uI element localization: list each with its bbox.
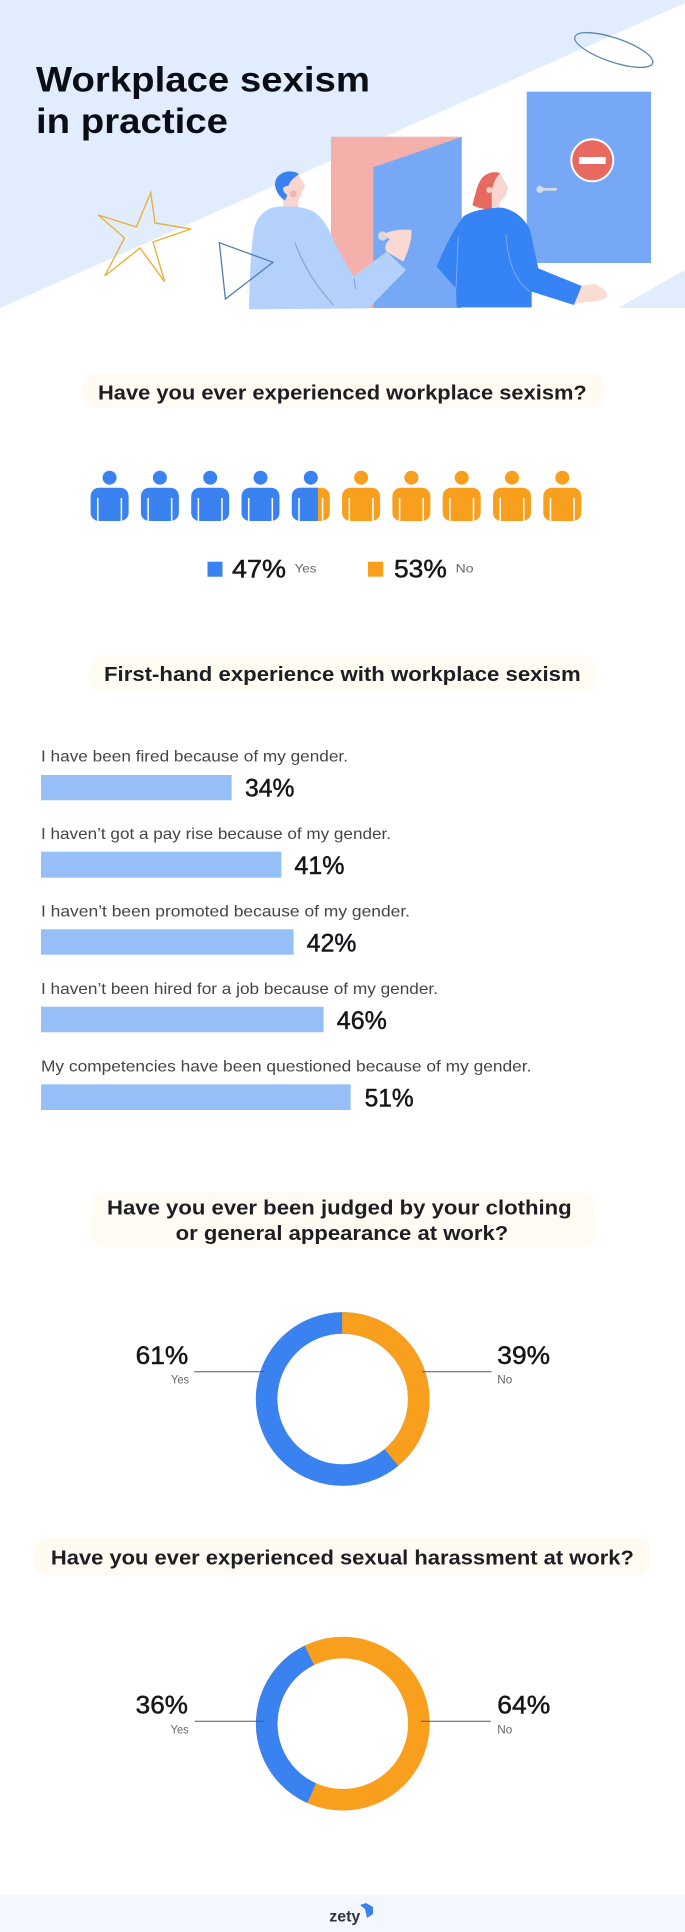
- bar: pay rise 41%: I haven’t got a pay rise because of my gender.: [41, 826, 391, 843]
- bar: promoted 42%: [41, 904, 410, 958]
- icon: outlined ellipse: [571, 25, 656, 75]
- bar: competencies 51%: My competencies have been questioned because of my gender.: [41, 1059, 531, 1076]
- logo wordmark: zety: [329, 1909, 361, 1926]
- heading pill: Have you ever been judged by your clothing: [107, 1196, 572, 1219]
- icon: logo mark: [360, 1903, 373, 1918]
- callout: no 39%: 39%: [497, 1342, 550, 1370]
- panel: sexual harassment: [34, 1538, 651, 1825]
- person 10: [543, 471, 581, 521]
- heading pill: [83, 373, 605, 408]
- bar: pay rise 41%: 41%: [294, 852, 344, 880]
- bar: hired 46%: [41, 981, 438, 1035]
- heading pill: or general appearance at work?: [176, 1222, 508, 1245]
- legend: yes: 47%: [232, 556, 286, 584]
- callout: no 64%: No: [497, 1724, 512, 1736]
- heading pill: [92, 1192, 595, 1248]
- person 8: [443, 471, 481, 521]
- donut chart 61/39: [267, 1323, 419, 1475]
- callout: yes 36%: 36%: [136, 1691, 188, 1719]
- callout: yes 61%: [136, 1342, 264, 1386]
- bar: competencies 51%: 51%: [365, 1085, 414, 1113]
- bar: pay rise 41%: [41, 826, 391, 880]
- man head: [275, 171, 305, 209]
- bar: competencies 51%: [41, 1059, 531, 1113]
- callout: yes 61%: Yes: [171, 1374, 189, 1386]
- bar: promoted 42%: I haven’t been promoted because of my gender.: [41, 904, 410, 921]
- legend: yes: Yes: [295, 564, 317, 576]
- panel: hero illustration: [0, 0, 685, 309]
- title: in practice: [36, 102, 228, 141]
- legend: yes: [208, 556, 317, 584]
- door handle: [536, 186, 557, 193]
- icon: outlined star: [98, 193, 191, 282]
- panel: judged by clothing: [92, 1192, 595, 1475]
- icon: outlined triangle: [219, 243, 273, 299]
- callout: yes 61%: 61%: [136, 1342, 188, 1370]
- heading pill: [34, 1538, 651, 1575]
- legend: no: [368, 556, 474, 584]
- heading pill: Have you ever experienced sexual harassment at work?: [51, 1546, 634, 1569]
- footer band with zety logo: [0, 1895, 685, 1932]
- person 7: [392, 471, 430, 521]
- woman hand: [575, 284, 607, 303]
- woman sweater: [437, 208, 582, 307]
- heading pill: First-hand experience with workplace sexism: [104, 663, 581, 686]
- bar: hired 46%: 46%: [337, 1007, 387, 1035]
- bar: promoted 42%: 42%: [307, 930, 356, 958]
- legend: no: No: [456, 564, 474, 576]
- legend: no: 53%: [394, 556, 447, 584]
- person 9: [493, 471, 531, 521]
- person 4: [242, 471, 280, 521]
- man figure: [249, 171, 412, 309]
- open door: [331, 137, 462, 308]
- bar: fired 34%: I have been fired because of my gender.: [41, 749, 348, 766]
- callout: no 64%: 64%: [497, 1691, 550, 1719]
- bar: fired 34%: [41, 749, 348, 803]
- panel: have you ever experienced workplace sexism: [83, 373, 605, 584]
- heading pill: [89, 655, 596, 692]
- woman figure: [437, 172, 607, 307]
- panel: first-hand experience: [41, 655, 596, 1113]
- donut chart 36/64: [242, 1623, 444, 1825]
- person 6: [342, 471, 380, 521]
- woman hair and face: [472, 172, 508, 209]
- man hand on door handle: [378, 230, 412, 262]
- person 3: [191, 471, 229, 521]
- heading pill: Have you ever experienced workplace sexism?: [98, 381, 587, 404]
- person 2: [141, 471, 179, 521]
- title: [36, 60, 370, 141]
- callout: no 39%: [422, 1342, 550, 1386]
- bar: fired 34%: 34%: [245, 775, 294, 803]
- person 5 split: [292, 471, 330, 521]
- callout: yes 36%: [136, 1691, 264, 1736]
- closed door with no-entry sign: [527, 92, 651, 263]
- callout: yes 36%: Yes: [171, 1724, 189, 1736]
- title: Workplace sexism: [36, 60, 370, 100]
- bar: hired 46%: I haven’t been hired for a job because of my gender.: [41, 981, 438, 998]
- pictogram: ten people: [91, 471, 581, 521]
- icon: no-entry sign: [571, 139, 613, 181]
- callout: no 64%: [421, 1691, 550, 1736]
- person 1: [91, 471, 129, 521]
- callout: no 39%: No: [497, 1374, 512, 1386]
- man sweater: [249, 206, 406, 309]
